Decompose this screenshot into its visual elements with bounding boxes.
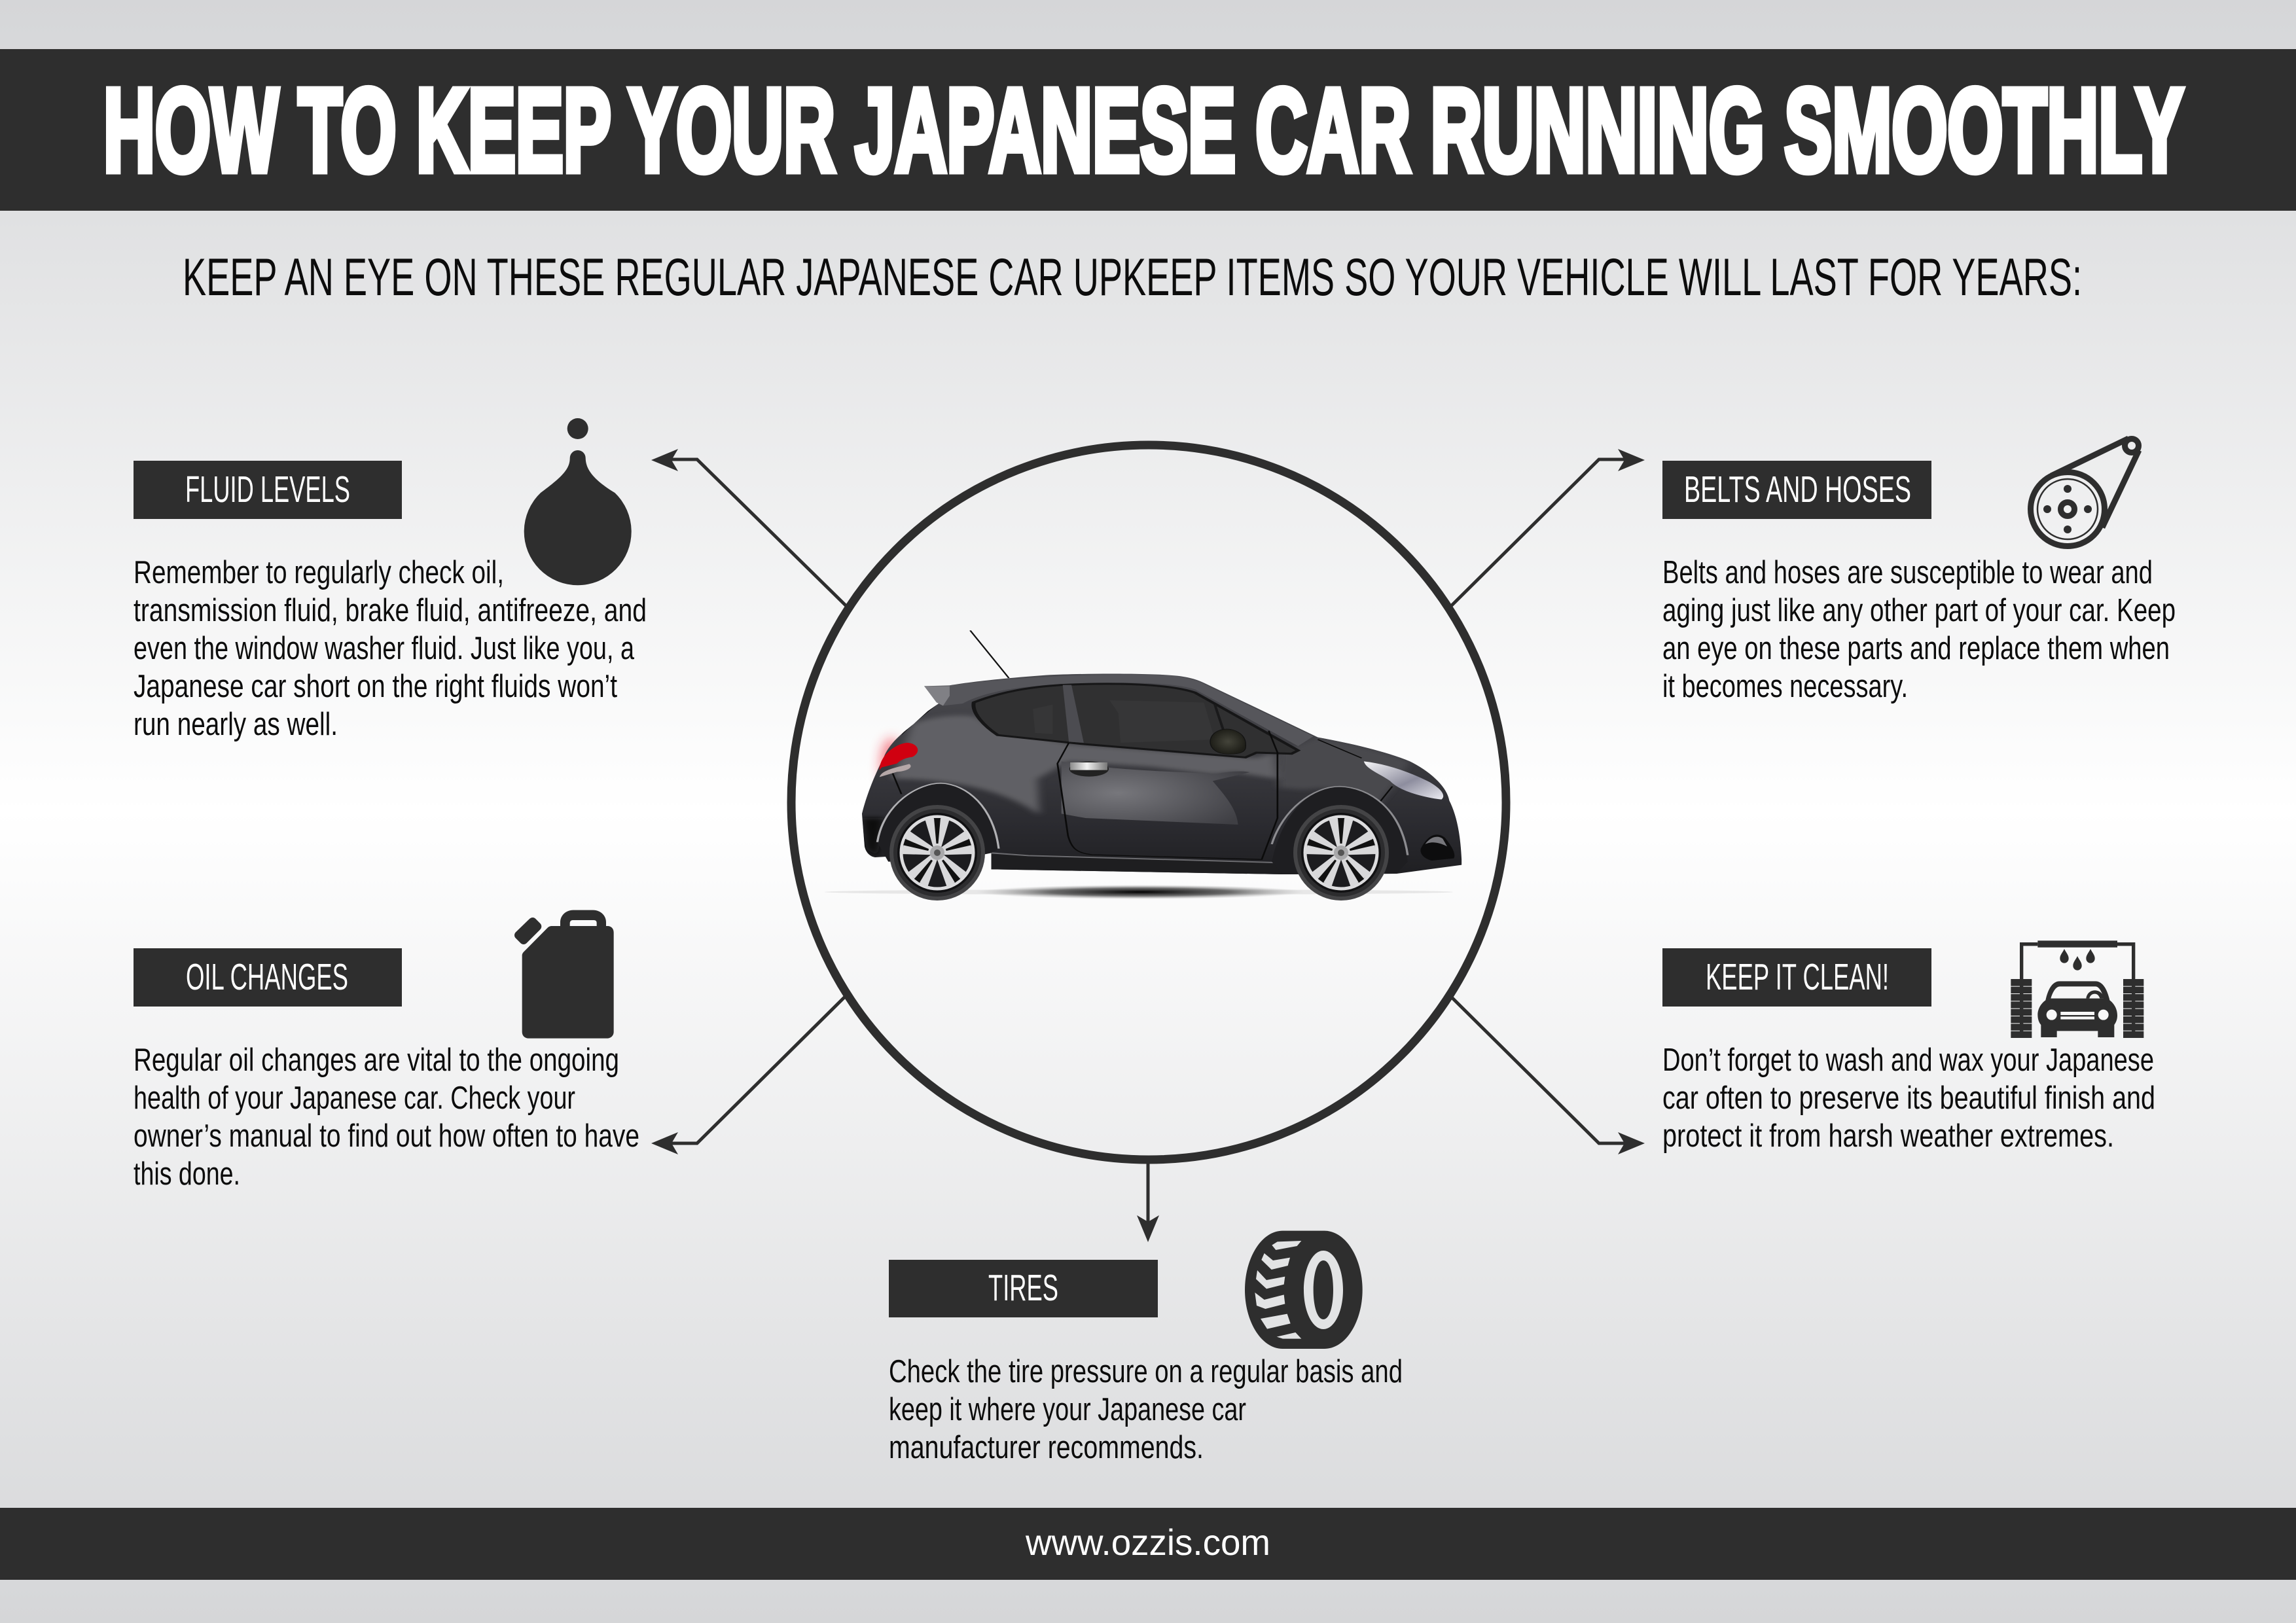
icon: fluid drop [524,418,632,585]
panel: keep it clean [1662,940,2155,1154]
text: fluid levels [134,555,647,742]
arrow: to oil changes [651,995,846,1154]
label [1662,948,1931,1007]
text: belts and hoses: Belts and hoses are susceptible to wear and [1662,555,2153,590]
arrow: to belts and hoses [1450,449,1645,607]
front wheel [1293,805,1389,901]
label: BELTS AND HOSES [1684,469,1911,510]
text: belts and hoses [1662,555,2176,704]
car body [862,630,1462,874]
panel: fluid levels [134,418,647,742]
label [134,461,402,519]
central circle [791,445,1506,1160]
text: keep it clean: car often to preserve its beautiful finish and [1662,1080,2155,1116]
side mirror [1210,705,1246,754]
icon: oil jerry can [514,910,614,1039]
footer bar [0,1508,2296,1580]
text: fluid levels: even the window washer fluid. Just like you, a [134,631,635,666]
arrow: to fluid levels [651,449,846,606]
text: oil changes: health of your Japanese car. Check your [134,1080,575,1116]
label [889,1260,1158,1317]
text: oil changes: Regular oil changes are vital to the ongoing [134,1043,619,1078]
text: oil changes: owner’s manual to find out how often to have [134,1118,639,1154]
arrow: to keep it clean [1450,995,1645,1154]
label: FLUID LEVELS [185,469,350,510]
text: tires: Check the tire pressure on a regular basis and [889,1354,1403,1389]
tail light glow [880,738,903,791]
door handle [1069,761,1109,777]
label [1662,461,1931,519]
icon: tire [1245,1231,1363,1349]
text: keep it clean: Don’t forget to wash and wax your Japanese [1662,1043,2154,1078]
label: OIL CHANGES [186,956,348,998]
text: fluid levels: Remember to regularly check oil, [134,555,504,590]
text: belts and hoses: it becomes necessary. [1662,669,1908,704]
panel: oil changes [134,910,639,1192]
car illustration [825,630,1462,901]
label [134,948,402,1007]
soft body highlights [862,715,1410,857]
arrow: to tires [1137,1162,1159,1242]
headlight [1364,761,1443,800]
icon: belt and pulley [2030,438,2139,546]
text: fluid levels: run nearly as well. [134,707,338,742]
label: TIRES [988,1267,1058,1309]
text: belts and hoses: an eye on these parts and replace them when [1662,631,2170,666]
text: fluid levels: Japanese car short on the right fluids won’t [134,669,617,704]
panel: tires [889,1231,1403,1465]
footer url: www.ozzis.com [1025,1522,1270,1563]
text: belts and hoses: aging just like any other part of your car. Keep [1662,593,2176,628]
text: keep it clean: protect it from harsh weather extremes. [1662,1118,2114,1154]
car shadow [825,885,1453,899]
text: oil changes: this done. [134,1156,240,1192]
label: KEEP IT CLEAN! [1706,956,1889,998]
tail light [880,743,918,777]
text: keep it clean [1662,1043,2155,1154]
text: tires: manufacturer recommends. [889,1430,1204,1465]
icon: car wash [2011,940,2144,1038]
text: tires: keep it where your Japanese car [889,1392,1246,1427]
text: fluid levels: transmission fluid, brake fluid, antifreeze, and [134,593,647,628]
door seams [1058,731,1278,859]
title banner [0,49,2296,211]
text: tires [889,1354,1403,1465]
rear wheel [889,805,985,901]
front bumper vent [1420,834,1454,861]
panel: belts and hoses [1662,438,2176,704]
car windows [973,684,1298,757]
wheel arches [877,783,999,862]
text: oil changes [134,1043,639,1192]
